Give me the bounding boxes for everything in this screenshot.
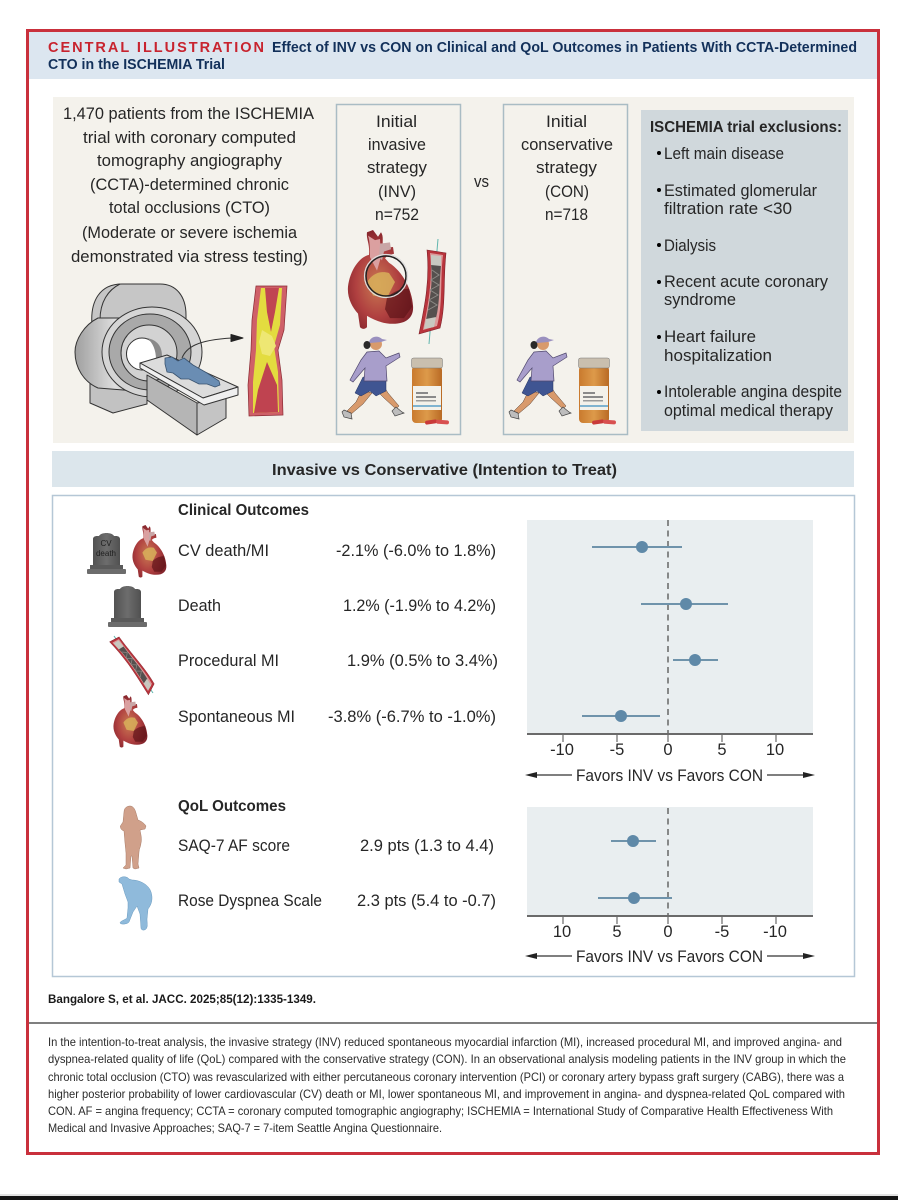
caption paragraph: In the intention-to-treat analysis, the invasive strategy (INV) reduced spontaneous myocardial infarction (MI), increased procedural MI, and improved angina- and bbox=[48, 1035, 842, 1049]
text block: patient population: tomography angiography bbox=[97, 152, 283, 170]
axis tick labels bbox=[550, 741, 784, 759]
direction arrows and caption bbox=[525, 767, 815, 785]
point: procedural MI bbox=[673, 654, 718, 666]
forest plot: QoL outcomes bbox=[525, 807, 815, 966]
axis tick labels: 10 bbox=[553, 923, 571, 941]
header band bbox=[29, 32, 877, 79]
caption paragraph bbox=[48, 1035, 846, 1135]
icon: CT scanner with patient bbox=[75, 284, 243, 435]
point: spontaneous MI bbox=[582, 710, 660, 722]
title line 2: CTO in the ISCHEMIA Trial bbox=[48, 57, 225, 73]
text block: patient population: (CCTA)-determined chronic bbox=[90, 176, 289, 194]
text block: patient population: total occlusions (CTO) bbox=[109, 199, 270, 217]
caption paragraph: chronic total occlusion (CTO) was revascularized with either percutaneous coronary intervention (PCI) or coronary artery bypass graft surgery (CABG), there was a bbox=[48, 1070, 844, 1084]
axis tick labels: 5 bbox=[612, 923, 622, 941]
row: procedural MI bbox=[106, 635, 498, 695]
exclusions list: Recent acute coronary bbox=[664, 273, 829, 291]
icon: CV death tombstone bbox=[87, 533, 126, 574]
label: SAQ-7 AF score bbox=[178, 837, 290, 855]
point: SAQ-7 AF bbox=[611, 835, 656, 847]
value: 2.3 pts (5.4 to -0.7) bbox=[357, 892, 496, 910]
section banner bbox=[52, 451, 854, 487]
forest plot: clinical outcomes bbox=[525, 520, 815, 785]
exclusions list: optimal medical therapy bbox=[664, 402, 834, 420]
row: death bbox=[108, 586, 496, 627]
icon: pill bottle bbox=[578, 358, 616, 425]
label: Spontaneous MI bbox=[178, 708, 295, 726]
axis tick labels: 10 bbox=[766, 741, 784, 759]
caption paragraph: Medical and Invasive Approaches; SAQ-7 = 7-item Seattle Angina Questionnaire. bbox=[48, 1121, 442, 1135]
text block: patient population: demonstrated via stress testing) bbox=[71, 248, 308, 266]
exclusions list bbox=[657, 145, 842, 420]
row: spontaneous MI bbox=[113, 695, 496, 748]
axis tick labels: -5 bbox=[715, 923, 729, 941]
exclusions list: Heart failure bbox=[664, 328, 756, 346]
row: SAQ-7 AF score bbox=[120, 806, 494, 869]
arm label bbox=[521, 113, 613, 224]
direction arrows and caption bbox=[525, 948, 815, 966]
axis tick labels: -10 bbox=[550, 741, 574, 759]
arm label: strategy bbox=[367, 159, 428, 177]
label: Rose Dyspnea Scale bbox=[178, 892, 322, 910]
caption paragraph: dyspnea-related quality of life (QoL) compared with the conservative strategy (CON). In an observational analysis modeling patients in the INV group in which the bbox=[48, 1052, 846, 1066]
value: -3.8% (-6.7% to -1.0%) bbox=[328, 708, 496, 726]
label: Death bbox=[178, 597, 221, 615]
value: -2.1% (-6.0% to 1.8%) bbox=[336, 542, 496, 560]
icon: person short of breath bbox=[119, 877, 152, 930]
caption paragraph: higher posterior probability of lower cardiovascular (CV) death or MI, lower spontaneous MI, and improvement in angina- and dyspnea-related QoL compared with bbox=[48, 1087, 845, 1101]
icon: stent bbox=[106, 635, 160, 695]
exclusions list: Left main disease bbox=[664, 145, 784, 163]
exclusions list: Intolerable angina despite bbox=[664, 383, 842, 401]
icon: stent bbox=[419, 239, 446, 344]
section banner: Invasive vs Conservative (Intention to Treat) bbox=[272, 462, 617, 479]
exclusions list: Dialysis bbox=[664, 237, 716, 255]
value: 1.9% (0.5% to 3.4%) bbox=[347, 652, 498, 670]
axis tick labels: -10 bbox=[763, 923, 787, 941]
arm label: (CON) bbox=[545, 183, 589, 201]
vs label: vs bbox=[474, 173, 489, 191]
point: death bbox=[641, 598, 728, 610]
arm label: conservative bbox=[521, 136, 613, 154]
title label: CENTRAL ILLUSTRATION bbox=[48, 40, 264, 56]
icon: pill bottle bbox=[412, 358, 449, 425]
exclusions list: filtration rate <30 bbox=[664, 200, 792, 218]
value: 1.2% (-1.9% to 4.2%) bbox=[343, 597, 496, 615]
exclusions list: syndrome bbox=[664, 291, 736, 309]
axis tick labels: 5 bbox=[717, 741, 727, 759]
heading: QoL outcomes: QoL Outcomes bbox=[178, 798, 286, 815]
point: CV death/MI bbox=[592, 541, 682, 553]
text block: patient population bbox=[63, 105, 314, 266]
direction arrows and caption: Favors INV vs Favors CON bbox=[576, 767, 763, 785]
arm label: n=718 bbox=[545, 206, 588, 224]
exclusions list: hospitalization bbox=[664, 347, 772, 365]
heading: clinical outcomes: Clinical Outcomes bbox=[178, 502, 309, 519]
title line 1: Effect of INV vs CON on Clinical and QoL Outcomes in Patients With CCTA-Determined bbox=[272, 40, 857, 56]
exclusions list: Estimated glomerular bbox=[664, 182, 817, 200]
icon: walking person bbox=[509, 337, 571, 419]
exclusions heading: ISCHEMIA trial exclusions: bbox=[650, 119, 842, 136]
axis tick labels: 0 bbox=[663, 923, 673, 941]
panel: outcomes bbox=[52, 496, 854, 976]
arm label: Initial bbox=[376, 113, 417, 131]
text block: patient population: 1,470 patients from the ISCHEMIA bbox=[63, 105, 314, 123]
arm label: Initial bbox=[546, 113, 587, 131]
arm label: strategy bbox=[536, 159, 598, 177]
axis tick labels: -5 bbox=[610, 741, 624, 759]
axis tick labels: 0 bbox=[663, 741, 673, 759]
citation: Bangalore S, et al. JACC. 2025;85(12):1335-1349. bbox=[48, 994, 316, 1006]
panel: study design bbox=[53, 97, 854, 443]
value: 2.9 pts (1.3 to 4.4) bbox=[360, 837, 494, 855]
label: Procedural MI bbox=[178, 652, 279, 670]
arm label: (INV) bbox=[378, 183, 416, 201]
icon: tombstone bbox=[108, 586, 147, 627]
axis tick labels bbox=[553, 923, 787, 941]
row: CV death/MI bbox=[87, 525, 496, 578]
icon: heart with circled occlusion bbox=[348, 230, 413, 329]
arm label: n=752 bbox=[375, 206, 419, 224]
arm label bbox=[367, 113, 428, 224]
label: CV death/MI bbox=[178, 542, 269, 560]
icon: person with chest pain bbox=[120, 806, 146, 869]
direction arrows and caption: Favors INV vs Favors CON bbox=[576, 948, 763, 966]
row: Rose Dyspnea Scale bbox=[119, 877, 496, 930]
icon: CV death tombstone: CV bbox=[100, 539, 112, 548]
text block: patient population: (Moderate or severe ischemia bbox=[82, 224, 298, 242]
point: Rose Dyspnea bbox=[598, 892, 672, 904]
icon: occluded artery bbox=[248, 286, 287, 416]
icon: heart bbox=[113, 695, 147, 748]
icon: CV death tombstone: death bbox=[96, 549, 116, 558]
panel: invasive strategy arm bbox=[336, 104, 460, 434]
caption paragraph: CON. AF = angina frequency; CCTA = coronary computed tomographic angiography; ISCHEMIA = International Study of Comparative Health Effectiveness With bbox=[48, 1104, 833, 1118]
icon: walking person bbox=[342, 337, 404, 419]
panel: trial exclusions bbox=[641, 110, 848, 431]
icon: heart bbox=[132, 525, 166, 578]
text block: patient population: trial with coronary computed bbox=[83, 129, 296, 147]
arm label: invasive bbox=[368, 136, 426, 154]
panel: conservative strategy arm bbox=[504, 104, 628, 434]
